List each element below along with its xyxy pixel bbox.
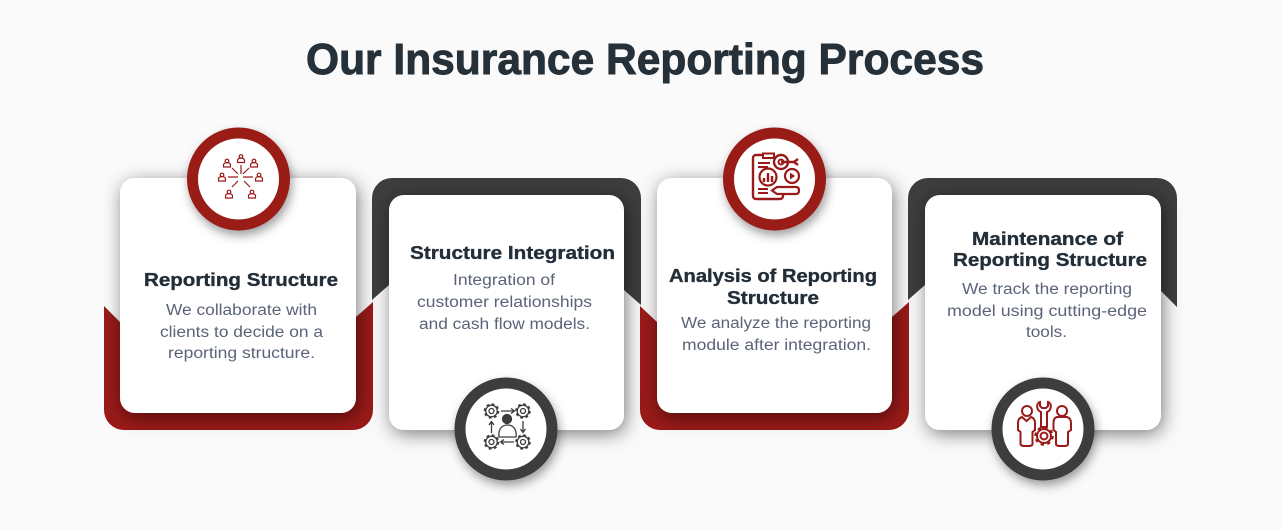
icon: team and wrench badge [997,383,1089,475]
body text 4: tools. [1026,324,1067,341]
body text 2: and cash flow models. [419,316,590,333]
body text 4: We track the reporting [962,281,1132,298]
dark backing 4 [908,178,1177,307]
heading 2: Structure Integration [410,242,615,263]
panel: maintenance of reporting structure [908,178,1177,430]
panel: structure integration [372,178,641,430]
heading 3: Structure [727,287,819,308]
body text 4 [947,281,1147,341]
body text 2: customer relationships [417,294,592,311]
red backing 1 [104,302,373,430]
heading 1: Reporting Structure [144,269,338,290]
body text 3: module after integration. [682,337,871,354]
body text 2: Integration of [453,272,556,289]
body text 1: reporting structure. [168,345,315,362]
heading 3 [669,265,877,308]
body text 2 [417,272,592,333]
panel: reporting structure [104,178,373,430]
body text 1: clients to decide on a [160,324,323,341]
card 1 [120,178,356,413]
card 4 [925,195,1161,430]
body text 3 [681,315,871,354]
title: Our Insurance Reporting Process [306,35,984,84]
heading 3: Analysis of Reporting [669,265,877,286]
panel: analysis of reporting structure [640,178,909,430]
body text 1: We collaborate with [166,302,317,319]
body text 1 [160,302,323,362]
icon: report clipboard badge [728,133,820,225]
body text 3: We analyze the reporting [681,315,871,332]
body text 4: model using cutting-edge [947,303,1147,320]
heading 4: Reporting Structure [953,249,1147,270]
red backing 3 [640,302,909,430]
heading 4: Maintenance of [972,228,1124,249]
icon: people network badge [192,133,284,225]
card 3 [657,178,892,413]
dark backing 2 [372,178,641,305]
icon: gears and person badge [460,383,552,475]
card 2 [389,195,624,430]
heading 4 [953,228,1147,270]
